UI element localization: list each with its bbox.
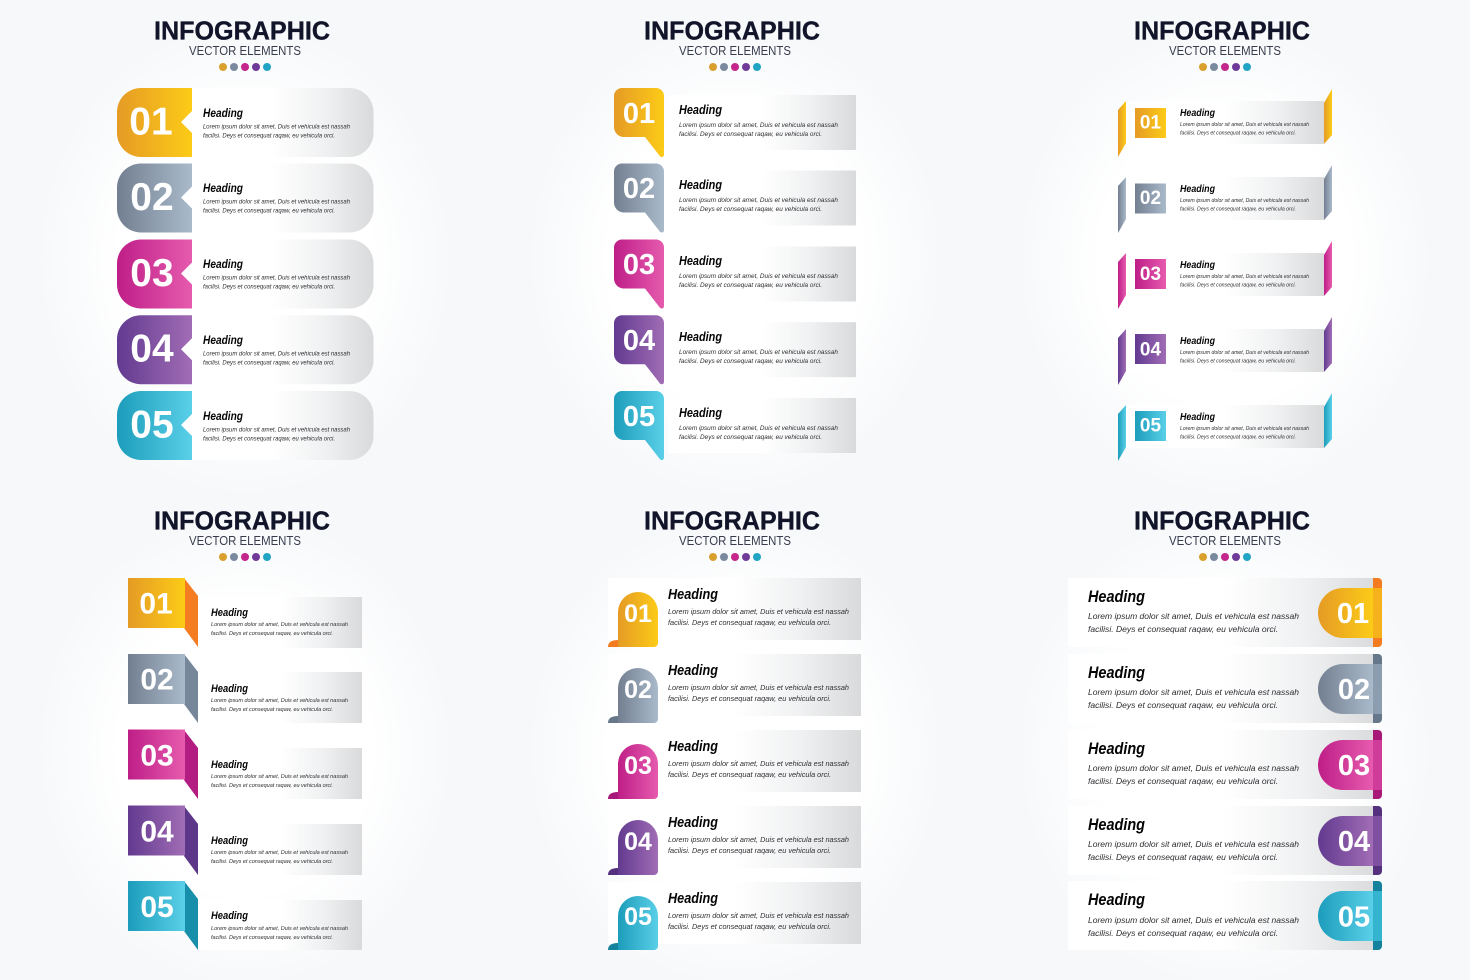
row 03: Lorem ipsum dolor sit amet, Duis et vehicula est nassah (679, 273, 838, 280)
row 04 (608, 806, 861, 875)
row 02: 02 (130, 176, 174, 219)
row 03: Heading (1088, 740, 1145, 758)
title block: VECTOR ELEMENTS (189, 533, 301, 548)
row 05: facilisi. Deys et consequat raqaw, eu vehicula orci. (1088, 928, 1278, 938)
title block: VECTOR ELEMENTS (679, 533, 791, 548)
row 02: 02 (140, 664, 174, 696)
panel: tabbed rounded list (117, 18, 374, 460)
row 03: facilisi. Deys et consequat raqaw, eu vehicula orci. (211, 783, 333, 789)
row 01: Heading (203, 108, 243, 120)
row 03: facilisi. Deys et consequat raqaw, eu vehicula orci. (1088, 776, 1278, 786)
row 03: Heading (211, 759, 248, 771)
row 03: Heading (203, 259, 243, 271)
row 02: Lorem ipsum dolor sit amet, Duis et vehicula est nassah (668, 683, 849, 692)
row 01: Lorem ipsum dolor sit amet, Duis et vehicula est nassah (1088, 611, 1299, 621)
row 05: 05 (1140, 416, 1161, 436)
title block (154, 508, 330, 561)
row 01: Lorem ipsum dolor sit amet, Duis et vehicula est nassah (668, 607, 849, 616)
row 03: 03 (624, 752, 652, 780)
row 04 (128, 806, 362, 875)
title block: INFOGRAPHIC (154, 508, 330, 536)
row 02: Lorem ipsum dolor sit amet, Duis et vehicula est nassah (1180, 198, 1309, 204)
row 01: 01 (1337, 598, 1369, 630)
row 03: 03 (1338, 750, 1370, 782)
title block (1134, 18, 1310, 71)
row 01: Heading (668, 587, 718, 603)
row 02: facilisi. Deys et consequat raqaw, eu vehicula orci. (1180, 206, 1296, 212)
panel: folded flag list (128, 508, 362, 950)
row 01: 01 (624, 600, 652, 628)
row 04: Lorem ipsum dolor sit amet, Duis et vehicula est nassah (668, 835, 849, 844)
title block (644, 18, 820, 71)
row 01: facilisi. Deys et consequat raqaw, eu vehicula orci. (679, 131, 822, 138)
row 02 (128, 654, 362, 723)
row 02: Heading (1088, 664, 1145, 682)
row 02 (1068, 654, 1382, 723)
title block (1134, 508, 1310, 561)
row 05: facilisi. Deys et consequat raqaw, eu vehicula orci. (203, 436, 335, 442)
row 04: Lorem ipsum dolor sit amet, Duis et vehicula est nassah (1180, 350, 1309, 356)
row 05 (614, 391, 856, 460)
row 05: 05 (1338, 902, 1370, 934)
title block: INFOGRAPHIC (1134, 18, 1310, 46)
row 02: facilisi. Deys et consequat raqaw, eu vehicula orci. (668, 694, 831, 703)
row 05: Heading (203, 411, 243, 423)
row 04 (614, 315, 856, 384)
row 05 (1068, 881, 1382, 950)
row 05: Heading (1180, 412, 1216, 423)
row 01: facilisi. Deys et consequat raqaw, eu vehicula orci. (1088, 624, 1278, 634)
row 01: Lorem ipsum dolor sit amet, Duis et vehicula est nassah (211, 622, 348, 628)
row 03 (614, 240, 856, 308)
row 03: Heading (1180, 260, 1216, 271)
row 03: Lorem ipsum dolor sit amet, Duis et vehicula est nassah (1180, 274, 1309, 280)
row 05: facilisi. Deys et consequat raqaw, eu vehicula orci. (211, 935, 333, 941)
row 05 (1118, 393, 1332, 461)
row 01: facilisi. Deys et consequat raqaw, eu vehicula orci. (211, 631, 333, 637)
row 03: facilisi. Deys et consequat raqaw, eu vehicula orci. (1180, 282, 1296, 288)
row 05 (128, 881, 362, 950)
title block: VECTOR ELEMENTS (189, 43, 301, 58)
panel: square badge list with slanted flaps (1118, 18, 1332, 461)
row 02: Heading (668, 663, 718, 679)
row 01: 01 (129, 100, 173, 144)
row 01 (608, 578, 861, 647)
row 04: facilisi. Deys et consequat raqaw, eu vehicula orci. (211, 859, 333, 865)
row 04: Lorem ipsum dolor sit amet, Duis et vehicula est nassah (203, 350, 351, 357)
row 03: Heading (679, 254, 722, 268)
row 01: Lorem ipsum dolor sit amet, Duis et vehicula est nassah (1180, 122, 1309, 128)
row 01: Lorem ipsum dolor sit amet, Duis et vehicula est nassah (203, 124, 351, 130)
row 03 (128, 730, 362, 799)
row 04: Heading (211, 835, 248, 847)
row 04: 04 (130, 328, 174, 371)
row 02: facilisi. Deys et consequat raqaw, eu vehicula orci. (679, 206, 822, 213)
row 02: Heading (211, 683, 248, 695)
title block (644, 508, 820, 561)
row 03: facilisi. Deys et consequat raqaw, eu vehicula orci. (679, 282, 822, 289)
row 05: Lorem ipsum dolor sit amet, Duis et vehicula est nassah (1180, 426, 1309, 432)
panel: arched tab list (608, 508, 861, 950)
row 03: 03 (140, 740, 174, 772)
row 03: Lorem ipsum dolor sit amet, Duis et vehicula est nassah (211, 774, 348, 780)
row 05: facilisi. Deys et consequat raqaw, eu vehicula orci. (1180, 434, 1296, 440)
row 05: Heading (1088, 891, 1145, 909)
row 03: 03 (130, 252, 174, 295)
row 05: 05 (140, 891, 174, 924)
row 02: Heading (203, 183, 243, 195)
title block: INFOGRAPHIC (644, 508, 820, 536)
row 03 (1118, 241, 1332, 309)
row 02 (1118, 165, 1332, 233)
row 05: 05 (624, 903, 652, 931)
title block: INFOGRAPHIC (1134, 508, 1310, 536)
row 04: 04 (1140, 340, 1161, 360)
row 01: Lorem ipsum dolor sit amet, Duis et vehicula est nassah (679, 122, 838, 129)
row 01: Heading (679, 103, 722, 117)
row 04: 04 (623, 325, 655, 357)
title block: VECTOR ELEMENTS (1169, 43, 1281, 58)
row 05: 05 (130, 404, 174, 446)
row 01 (1068, 578, 1382, 647)
row 05: Lorem ipsum dolor sit amet, Duis et vehicula est nassah (668, 911, 849, 920)
row 03: 03 (1140, 264, 1161, 285)
row 04: Lorem ipsum dolor sit amet, Duis et vehicula est nassah (679, 349, 838, 356)
row 02: Lorem ipsum dolor sit amet, Duis et vehicula est nassah (1088, 687, 1299, 697)
row 04: Heading (679, 330, 722, 344)
row 04: Lorem ipsum dolor sit amet, Duis et vehicula est nassah (211, 850, 348, 856)
row 04: 04 (1338, 826, 1370, 858)
title block: INFOGRAPHIC (644, 18, 820, 46)
row 04: Heading (203, 335, 243, 347)
row 01: Heading (1088, 588, 1145, 606)
row 02: facilisi. Deys et consequat raqaw, eu vehicula orci. (203, 208, 335, 214)
row 04: facilisi. Deys et consequat raqaw, eu vehicula orci. (679, 358, 822, 365)
row 04 (117, 315, 374, 384)
row 01: 01 (623, 98, 655, 130)
row 02: Lorem ipsum dolor sit amet, Duis et vehicula est nassah (211, 698, 348, 704)
row 03: facilisi. Deys et consequat raqaw, eu vehicula orci. (668, 770, 831, 779)
row 04: Heading (1088, 816, 1145, 834)
row 04: Lorem ipsum dolor sit amet, Duis et vehicula est nassah (1088, 839, 1299, 849)
row 02: facilisi. Deys et consequat raqaw, eu vehicula orci. (1088, 700, 1278, 710)
row 01 (128, 578, 362, 648)
row 02: Lorem ipsum dolor sit amet, Duis et vehicula est nassah (203, 198, 351, 206)
row 04: facilisi. Deys et consequat raqaw, eu vehicula orci. (203, 359, 335, 366)
row 02 (117, 164, 374, 232)
row 03: Heading (668, 739, 718, 755)
row 04: facilisi. Deys et consequat raqaw, eu vehicula orci. (1180, 358, 1296, 364)
title block: VECTOR ELEMENTS (679, 43, 791, 58)
row 01: Heading (211, 607, 248, 619)
row 01: facilisi. Deys et consequat raqaw, eu vehicula orci. (668, 618, 831, 627)
row 01 (1118, 89, 1332, 157)
row 03: Lorem ipsum dolor sit amet, Duis et vehicula est nassah (1088, 763, 1299, 773)
row 05: Lorem ipsum dolor sit amet, Duis et vehicula est nassah (1088, 915, 1299, 925)
row 01: 01 (139, 588, 173, 620)
row 03 (608, 730, 861, 799)
row 04: Heading (668, 815, 718, 831)
row 03: 03 (623, 249, 655, 281)
row 04 (1068, 806, 1382, 875)
row 04: facilisi. Deys et consequat raqaw, eu vehicula orci. (668, 846, 831, 855)
row 02: 02 (1140, 188, 1161, 209)
row 05 (608, 882, 861, 950)
row 02: Lorem ipsum dolor sit amet, Duis et vehicula est nassah (679, 197, 838, 204)
row 02: 02 (1338, 674, 1370, 706)
row 05: Lorem ipsum dolor sit amet, Duis et vehicula est nassah (211, 926, 348, 932)
row 02: 02 (624, 676, 652, 704)
row 01: 01 (1140, 112, 1161, 134)
row 02: Heading (679, 178, 722, 192)
row 02: facilisi. Deys et consequat raqaw, eu vehicula orci. (211, 707, 333, 713)
row 04: 04 (140, 816, 174, 848)
row 01: Heading (1180, 108, 1216, 119)
title block (154, 18, 330, 71)
row 05: Lorem ipsum dolor sit amet, Duis et vehicula est nassah (679, 425, 838, 432)
row 05: facilisi. Deys et consequat raqaw, eu vehicula orci. (668, 922, 831, 931)
row 05: Heading (668, 891, 718, 907)
row 01: facilisi. Deys et consequat raqaw, eu vehicula orci. (1180, 130, 1296, 136)
row 03: facilisi. Deys et consequat raqaw, eu vehicula orci. (203, 284, 335, 290)
row 03: Lorem ipsum dolor sit amet, Duis et vehicula est nassah (203, 274, 351, 282)
row 04: facilisi. Deys et consequat raqaw, eu vehicula orci. (1088, 852, 1278, 862)
row 05: Heading (211, 910, 248, 922)
row 04: Heading (1180, 336, 1216, 347)
row 02: Heading (1180, 184, 1216, 195)
panel: speech bubble list (614, 18, 856, 460)
row 03: Lorem ipsum dolor sit amet, Duis et vehicula est nassah (668, 759, 849, 768)
row 05: Heading (679, 406, 722, 420)
row 01 (614, 88, 856, 157)
row 02 (608, 654, 861, 723)
title block: INFOGRAPHIC (154, 18, 330, 46)
row 01 (117, 88, 374, 157)
row 01: facilisi. Deys et consequat raqaw, eu vehicula orci. (203, 132, 335, 140)
row 02: 02 (623, 173, 655, 205)
row 05: Lorem ipsum dolor sit amet, Duis et vehicula est nassah (203, 426, 351, 434)
row 02 (614, 164, 856, 232)
panel: right pill badge list (1068, 508, 1382, 950)
row 05 (117, 391, 374, 460)
row 04 (1118, 317, 1332, 385)
row 05: facilisi. Deys et consequat raqaw, eu vehicula orci. (679, 434, 822, 441)
row 04: 04 (624, 828, 652, 856)
row 05: 05 (623, 401, 655, 433)
row 03 (1068, 730, 1382, 799)
row 03 (117, 240, 374, 308)
title block: VECTOR ELEMENTS (1169, 533, 1281, 548)
